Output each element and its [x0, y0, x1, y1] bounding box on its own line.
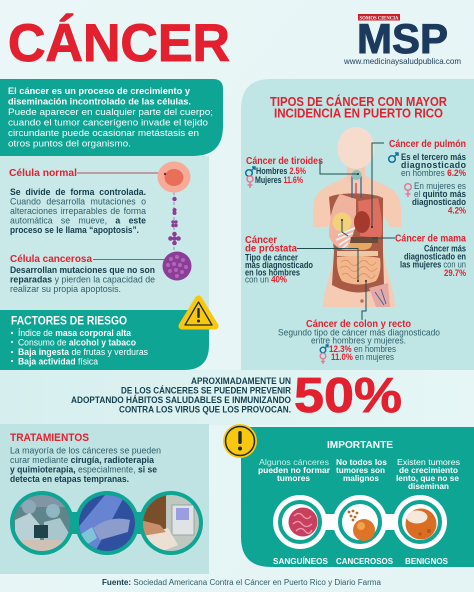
callout: cáncer de colon y recto: Cáncer de colon y recto — [306, 319, 411, 330]
icon: blood tumor — [288, 508, 318, 536]
icons: tumor types — [273, 495, 447, 549]
text: column 3: lento, que no se — [396, 473, 459, 483]
callout: cáncer de tiroides: Cáncer de tiroides — [246, 156, 323, 167]
text: column 2 — [336, 457, 387, 483]
panel: factores de riesgo — [0, 310, 209, 370]
panel: introduction: diseminación incontrolado de las células. — [8, 96, 191, 106]
photo: chemotherapy — [143, 495, 199, 551]
labels: tumor types: BENIGNOS — [405, 557, 449, 566]
text: tratamientos: detecta en etapas tempranas. — [10, 474, 129, 484]
statistic: 50%: 50% — [294, 369, 402, 423]
panel: introduction — [0, 79, 223, 156]
icon: male — [320, 345, 328, 353]
text: célula cancerosa: realizar su propia apoptosis. — [10, 284, 121, 294]
heading: tipos de cáncer — [270, 94, 447, 120]
text: prevention: CONTRA LOS VIRUS QUE LOS PROVOCAN. — [119, 404, 291, 414]
heading: célula normal: Célula normal — [9, 167, 77, 179]
list: risk factors: Baja actividad física — [18, 356, 98, 366]
source: Fuente: Sociedad Americana Contra el Cáncer en Puerto Rico y Diario Farma — [102, 578, 382, 587]
text: tratamientos — [10, 446, 161, 484]
callout: cáncer de pulmón: el quinto más — [414, 189, 466, 199]
text: prevention: DE LOS CÁNCERES SE PUEDEN PREVENIR — [121, 386, 292, 396]
logo: MSP: MSP — [357, 15, 448, 62]
callout: cáncer de próstata: en los hombres — [245, 268, 300, 278]
callout: cáncer de próstata: más diagnosticado — [245, 260, 314, 270]
callout: cáncer de colon y recto: 11.0% en mujeres — [331, 352, 395, 362]
callout: cáncer de pulmón — [389, 139, 467, 216]
callout: cáncer de próstata: de próstata — [245, 244, 297, 254]
text: column 3 — [396, 457, 460, 491]
text: column 1: pueden no formar — [258, 465, 331, 475]
callout: cáncer de mama: Cáncer de mama — [395, 234, 466, 244]
text: célula normal: proceso se le llama “apoptosis”. — [10, 225, 139, 235]
text: prevention — [71, 376, 292, 414]
callout: cáncer de colon y recto: entre hombres y mujeres. — [311, 336, 406, 346]
icon: male — [389, 153, 398, 162]
icon: female — [405, 184, 411, 197]
icon: warning triangle — [182, 299, 215, 326]
logo: MSP — [343, 14, 461, 66]
text: column 1 — [258, 457, 331, 483]
text: column 1: Algunos cánceres — [259, 457, 329, 467]
text: column 3: Existen tumores — [397, 457, 460, 467]
panel: importante: IMPORTANTE — [327, 439, 393, 451]
photos: treatments — [10, 490, 204, 556]
callout: cáncer de mama: 29.7% — [444, 268, 466, 278]
logo: MSP: SOMOS CIENCIA — [360, 16, 399, 21]
text: column 2: No todos los — [336, 457, 387, 467]
text: column 3: diseminan — [408, 481, 449, 491]
callout: cáncer de mama: Cáncer más — [424, 244, 466, 254]
logo: MSP: www.medicinaysaludpublica.com — [343, 56, 461, 66]
callout: cáncer de próstata — [245, 235, 314, 284]
panel: introduction: Puede aparecer en cualquier parte del cuerpo; — [8, 107, 213, 117]
text: tratamientos: y quimioterapia, especialmente, si se — [10, 464, 157, 474]
title: CÁNCER — [8, 13, 230, 73]
text: tratamientos: curar mediante cirugía, radioterapia — [10, 455, 154, 465]
icon: female — [320, 353, 326, 364]
icon: exclamation circle — [223, 424, 257, 458]
text: célula normal: alteraciones irreparables de forma — [10, 206, 146, 216]
panel: tratamientos — [0, 424, 209, 574]
callout: cáncer de pulmón: Es el tercero más — [401, 152, 466, 162]
text: célula normal — [10, 187, 146, 235]
heading: tipos de cáncer: INCIDENCIA EN PUERTO RICO — [274, 106, 443, 120]
text: célula normal: Cuando desarrolla mutaciones o — [10, 196, 146, 206]
callout: cáncer de pulmón: diagnosticado — [401, 160, 467, 170]
callout: cáncer de próstata: con un 40% — [245, 274, 287, 284]
text: column 2: tumores son — [336, 465, 385, 475]
list: risk factors: Consumo de alcohol y tabaco — [18, 338, 137, 348]
icon: female — [247, 176, 253, 188]
panel: introduction: otros puntos del organismo. — [8, 138, 131, 148]
callout: cáncer de colon y recto — [278, 319, 440, 364]
callout: cáncer de colon y recto: 12.3% en hombres — [329, 344, 397, 354]
text: column 2: malignos — [343, 473, 379, 483]
callout: cáncer de mama: las mujeres con un — [400, 260, 466, 270]
callout lines — [297, 143, 395, 320]
list: risk factors: Baja ingesta de frutas y verduras — [18, 347, 149, 357]
callout: cáncer de pulmón: En mujeres es — [414, 181, 467, 191]
panel: tratamientos: TRATAMIENTOS — [10, 432, 89, 444]
panel: prevention statistic — [0, 369, 474, 425]
callout: cáncer de tiroides — [246, 156, 323, 188]
icon: cancerous tumor — [348, 510, 375, 541]
callout: cáncer de próstata: Tipo de cáncer — [245, 252, 298, 262]
text: column 1: tumores — [277, 473, 310, 483]
heading: célula cancerosa: Célula cancerosa — [10, 253, 92, 265]
diagram: cell mutation chain — [77, 162, 192, 280]
panel: importante — [241, 427, 474, 567]
icon: male — [246, 167, 255, 176]
list: risk factors — [11, 328, 149, 366]
callout: cáncer de colon y recto: Segundo tipo de cáncer más diagnosticado — [278, 328, 440, 338]
callout: cáncer de pulmón: 4.2% — [448, 206, 466, 216]
panel: introduction: circundante puede ocasionar metástasis en — [8, 128, 199, 138]
callout: cáncer de tiroides: Mujeres 11.6% — [255, 175, 303, 185]
text: column 3: de crecimiento — [399, 465, 458, 475]
text: célula cancerosa: reparadas y pierden la capacidad de — [10, 274, 155, 284]
heading: tipos de cáncer: TIPOS DE CÁNCER CON MAYOR — [270, 94, 447, 109]
list: risk factors: Índice de masa corporal alta — [18, 328, 131, 338]
callout: cáncer de pulmón: Cáncer de pulmón — [389, 139, 466, 150]
callout: cáncer de mama — [395, 234, 466, 278]
callout: cáncer de tiroides: Hombres 2.5% — [256, 166, 306, 176]
panel: cells — [0, 156, 209, 310]
callout: cáncer de próstata: Cáncer — [245, 235, 277, 246]
labels: tumor types: CANCEROSOS — [336, 557, 394, 566]
text: célula cancerosa: Desarrollan mutaciones que no son — [10, 265, 155, 275]
callout: cáncer de pulmón: diagnosticado — [412, 197, 467, 207]
text: prevention: ADOPTANDO HÁBITOS SALUDABLES E INMUNIZANDO — [71, 395, 291, 405]
photo: radiotherapy — [79, 495, 135, 551]
callout: cáncer de pulmón: en hombres 6.2% — [401, 168, 466, 178]
panel: introduction: El cáncer es un proceso de crecimiento y — [8, 86, 191, 96]
icon: benign tumor — [406, 508, 436, 540]
labels: tumor types — [273, 557, 449, 566]
photo: surgery — [14, 495, 70, 551]
text: tratamientos: La mayoría de los cánceres se pueden — [10, 446, 161, 456]
text: célula cancerosa — [10, 265, 155, 294]
panel: factores de riesgo: FACTORES DE RIESGO — [11, 316, 127, 328]
text: célula normal: Se divide de forma controlada. — [10, 187, 146, 197]
illustration: human torso — [297, 127, 401, 320]
text: prevention: APROXIMADAMENTE UN — [191, 376, 291, 386]
labels: tumor types: SANGUÍNEOS — [273, 557, 329, 566]
panel: introduction: cuando el tumor cancerígeno invade el tejido — [8, 118, 208, 128]
text: célula normal: automática se mueve, a este — [10, 216, 146, 226]
panel: tipos de cáncer — [241, 79, 474, 370]
